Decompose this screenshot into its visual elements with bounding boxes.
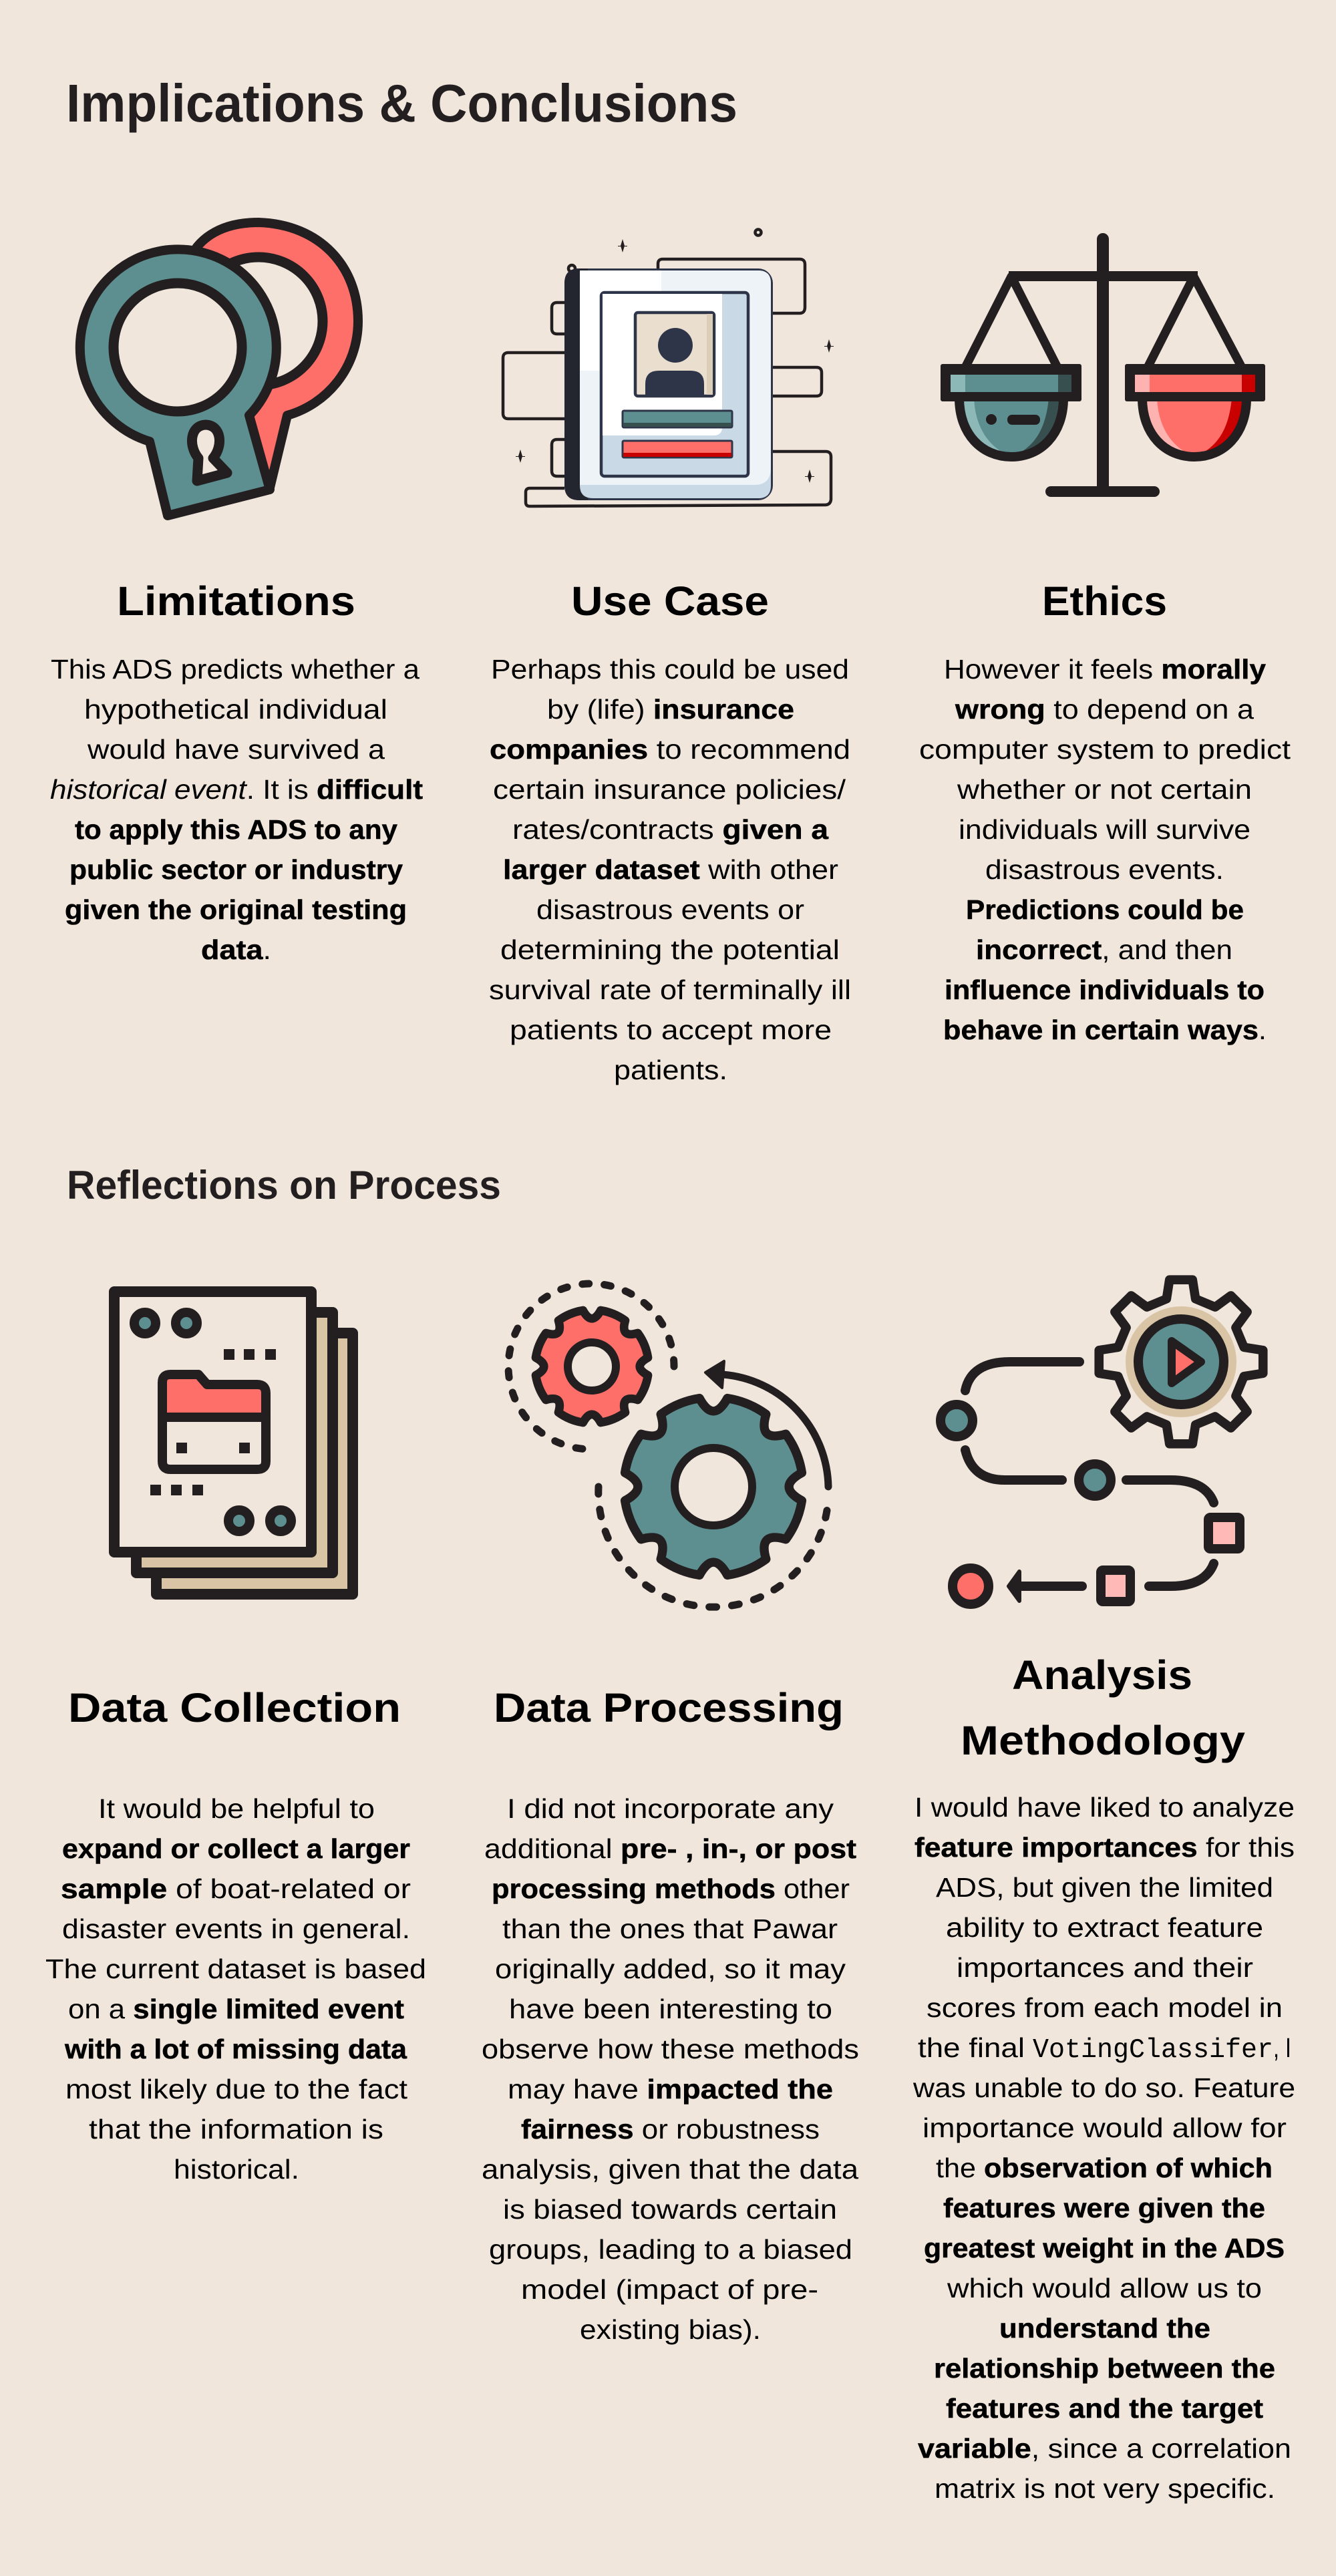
text: analysis methodology [912,1792,1295,2504]
text: analysis methodology: the observation of which [936,2153,1273,2183]
text: data collection: disaster events in general. [62,1913,410,1944]
text: analysis methodology: importances and their [957,1952,1253,1983]
text: analysis methodology: relationship between the [934,2353,1275,2384]
text: ethics: individuals will survive [959,814,1250,845]
text: limitations: historical event . It is difficult [50,774,423,805]
text: analysis methodology: greatest weight in the ADS [924,2233,1285,2263]
text: data collection [45,1793,426,2185]
heading: reflections on process: Reflections on Process [67,1163,501,1208]
text: use case: determining the potential [500,934,840,965]
text: analysis methodology: variable , since a correlation [918,2433,1291,2464]
text: use case: patients. [614,1055,727,1085]
text: analysis methodology: which would allow us to [947,2273,1262,2304]
icon: document stack [114,1292,353,1594]
text: data processing [482,1793,859,2345]
text: use case: patients to accept more [510,1015,832,1045]
text: use case: certain insurance policies/ [493,774,846,805]
panel: data collection [45,1292,426,2185]
text: ethics: behave in certain ways . [943,1015,1267,1045]
text: use case [489,654,851,1085]
text: use case: Perhaps this could be used [491,654,849,685]
panel: use case [489,230,851,1085]
text: limitations: data. [201,934,271,965]
text: analysis methodology: feature importances for this [914,1832,1295,1863]
heading: data collection: Data Collection [68,1685,401,1730]
text: ethics: whether or not certain [957,774,1252,805]
text: data collection: expand or collect a larger [62,1833,410,1864]
text: use case: disastrous events or [536,894,804,925]
text: use case: rates/contracts given a [512,814,829,845]
icon: id card [503,230,834,506]
text: limitations: This ADS predicts whether a [51,654,420,685]
text: analysis methodology: ADS, but given the limited [936,1872,1273,1903]
heading: analysis methodology [961,1652,1245,1763]
text: analysis methodology: features and the target [946,2393,1263,2424]
heading: use case: Use Case [571,578,769,624]
text: ethics: Predictions could be [966,894,1244,925]
text: use case: survival rate of terminally ill [489,974,851,1005]
panel: ethics [919,239,1291,1045]
heading: analysis methodology: Methodology [961,1718,1245,1763]
text: data collection: on a single limited event [68,1994,404,2024]
text: analysis methodology: the final [918,2032,1025,2063]
text: use case: companies to recommend [490,734,850,765]
panel: analysis methodology [912,1280,1295,2504]
text: analysis methodology: features were given the [943,2193,1265,2223]
text: ethics: incorrect , and then [976,934,1232,965]
text: limitations: to apply this ADS to any [75,814,397,845]
text: analysis methodology: , I [1273,2032,1291,2063]
text: analysis methodology: scores from each model in [927,1992,1283,2023]
text: ethics: wrong to depend on a [955,694,1254,725]
text: data processing: fairness or robustness [521,2114,820,2145]
text: data processing: processing methods other [492,1873,850,1904]
text: limitations: given the original testing [65,894,407,925]
text: data collection: with a lot of missing data [64,2034,407,2064]
text: analysis methodology: understand the [999,2313,1210,2344]
text: data processing: additional pre- , in-, or post [484,1833,856,1864]
panel: limitations [50,222,423,965]
icon: padlock tag [80,222,358,516]
heading: ethics: Ethics [1042,578,1167,624]
text: use case: larger dataset with other [503,854,838,885]
text: data processing: existing bias). [580,2314,761,2345]
text: data processing: observe how these methods [482,2034,859,2064]
text: analysis methodology: was unable to do so. Feature [912,2072,1295,2103]
icon: balance scales [941,239,1265,497]
heading: data processing: Data Processing [494,1685,844,1730]
heading: limitations: Limitations [117,578,355,624]
text: data processing: analysis, given that the data [482,2154,858,2185]
text: data processing: originally added, so it may [495,1954,846,1984]
text: limitations: would have survived a [87,734,385,765]
text: analysis methodology: matrix is not very specific. [935,2473,1275,2504]
text: data processing: model (impact of pre- [521,2274,818,2305]
panel: data processing [482,1284,859,2345]
text: ethics: However it feels morally [944,654,1266,685]
text: data collection: It would be helpful to [98,1793,375,1824]
text: limitations [50,654,423,965]
text: data processing: may have impacted the [508,2074,833,2104]
icon: gears [508,1284,828,1607]
text: ethics: computer system to predict [919,734,1291,765]
text: use case: by (life) insurance [547,694,794,725]
text: analysis methodology: ability to extract feature [946,1912,1263,1943]
text: analysis methodology: importance would allow for [923,2112,1287,2143]
text: data collection: The current dataset is based [45,1954,426,1984]
text: ethics [919,654,1291,1045]
text: ethics: influence individuals to [945,974,1265,1005]
text: data processing: I did not incorporate any [507,1793,834,1824]
text: limitations: public sector or industry [69,854,403,885]
text: data processing: than the ones that Pawar [502,1913,838,1944]
title: Implications & Conclusions [66,73,737,133]
text: data processing: have been interesting to [509,1994,832,2024]
heading: analysis methodology: Analysis [1012,1652,1192,1698]
text: analysis methodology: VotingClassifer [1033,2035,1273,2066]
text: data processing: is biased towards certain [503,2194,837,2225]
text: data processing: groups, leading to a biased [489,2234,852,2265]
text: data collection: most likely due to the fact [65,2074,408,2104]
text: limitations: hypothetical individual [84,694,387,725]
text: data collection: that the information is [89,2114,383,2145]
text: data collection: sample of boat-related or [61,1873,411,1904]
text: ethics: disastrous events. [985,854,1224,885]
text: analysis methodology: I would have liked to analyze [914,1792,1295,1823]
icon: process flow with gear [941,1280,1263,1604]
text: data collection: historical. [174,2154,299,2185]
